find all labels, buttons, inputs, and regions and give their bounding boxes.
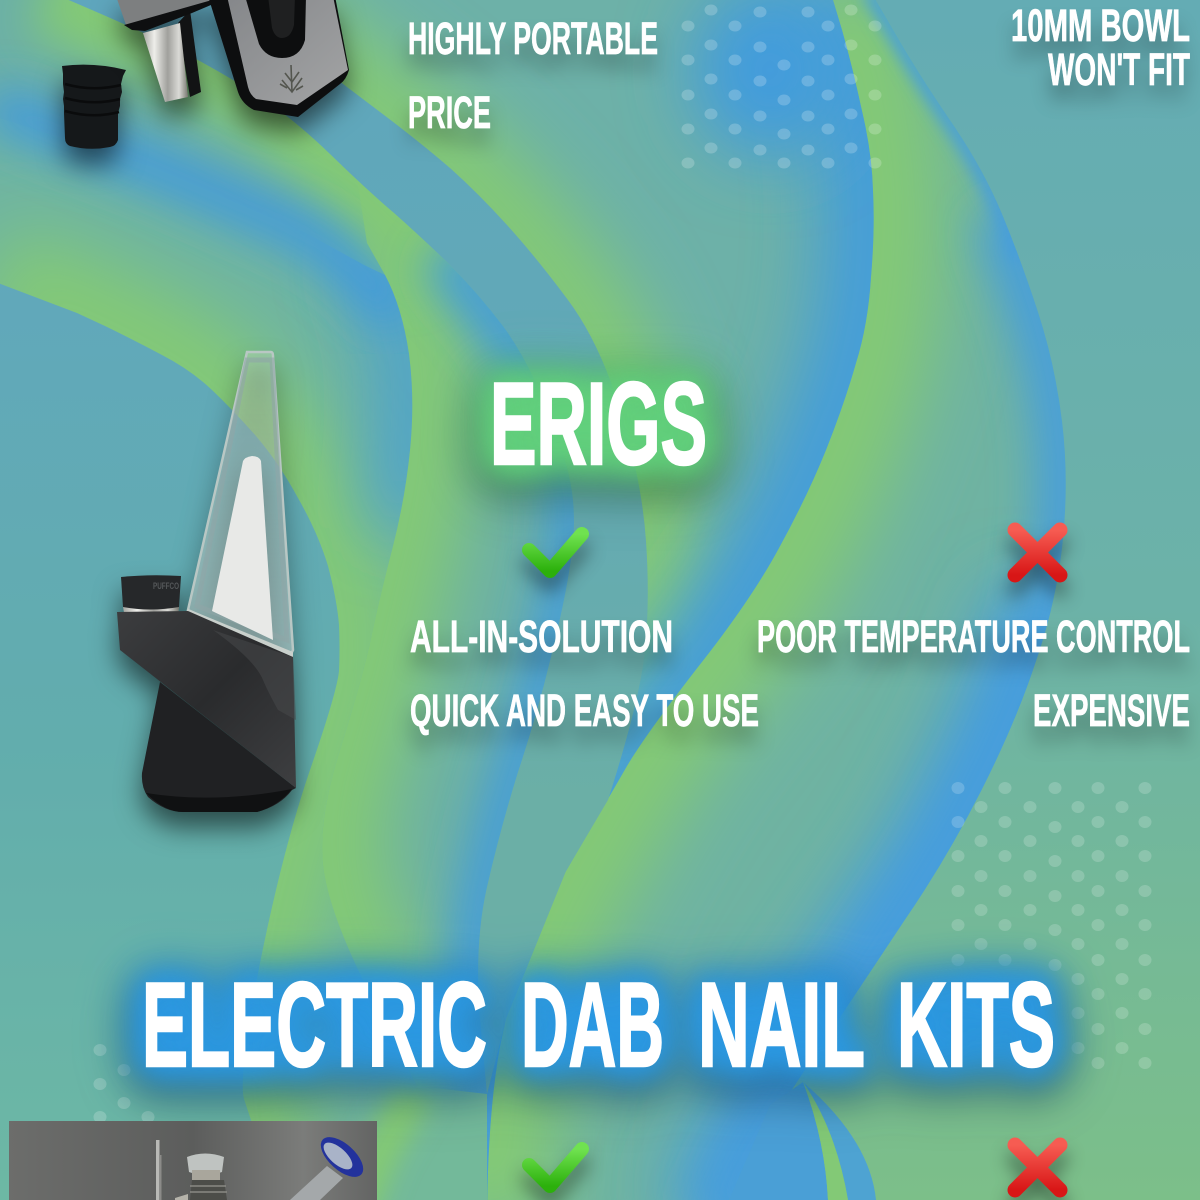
icon: portable vaporizer device <box>116 0 349 117</box>
heading: eRigs: ERIGS <box>490 358 707 489</box>
list: portable pros: PRICE <box>408 87 491 138</box>
list: eRig pros <box>410 611 759 736</box>
list: eRig cons <box>757 611 1190 736</box>
icon: eRig device: PUFFCO <box>153 581 179 591</box>
heading: electric dab nail kits <box>142 958 1055 1092</box>
icon: green check nail kits <box>529 1149 582 1186</box>
list: portable pros: HIGHLY PORTABLE <box>408 13 658 64</box>
halftone dots: lower right <box>952 782 1152 1069</box>
list: eRig pros: ALL-IN-SOLUTION <box>410 611 673 662</box>
halftone dots: lower left <box>94 1044 154 1123</box>
icon: rubber mouthpiece <box>62 65 126 149</box>
icon: eRig device <box>117 352 296 812</box>
icon: red cross nail kits <box>1015 1145 1060 1190</box>
list: portable pros <box>408 13 658 138</box>
halftone dots: top <box>682 4 882 168</box>
icon: red cross eRigs <box>1015 530 1060 575</box>
icon: green check eRigs <box>529 534 582 571</box>
heading: electric dab nail kits: ELECTRIC <box>142 958 487 1092</box>
list: portable cons <box>1011 0 1190 95</box>
heading: electric dab nail kits: NAIL <box>698 958 865 1092</box>
heading: electric dab nail kits: KITS <box>897 958 1055 1092</box>
heading: electric dab nail kits: DAB <box>521 958 664 1092</box>
list: eRig pros: QUICK AND EASY TO USE <box>410 685 759 736</box>
photo: electric nail kit <box>9 1121 377 1200</box>
